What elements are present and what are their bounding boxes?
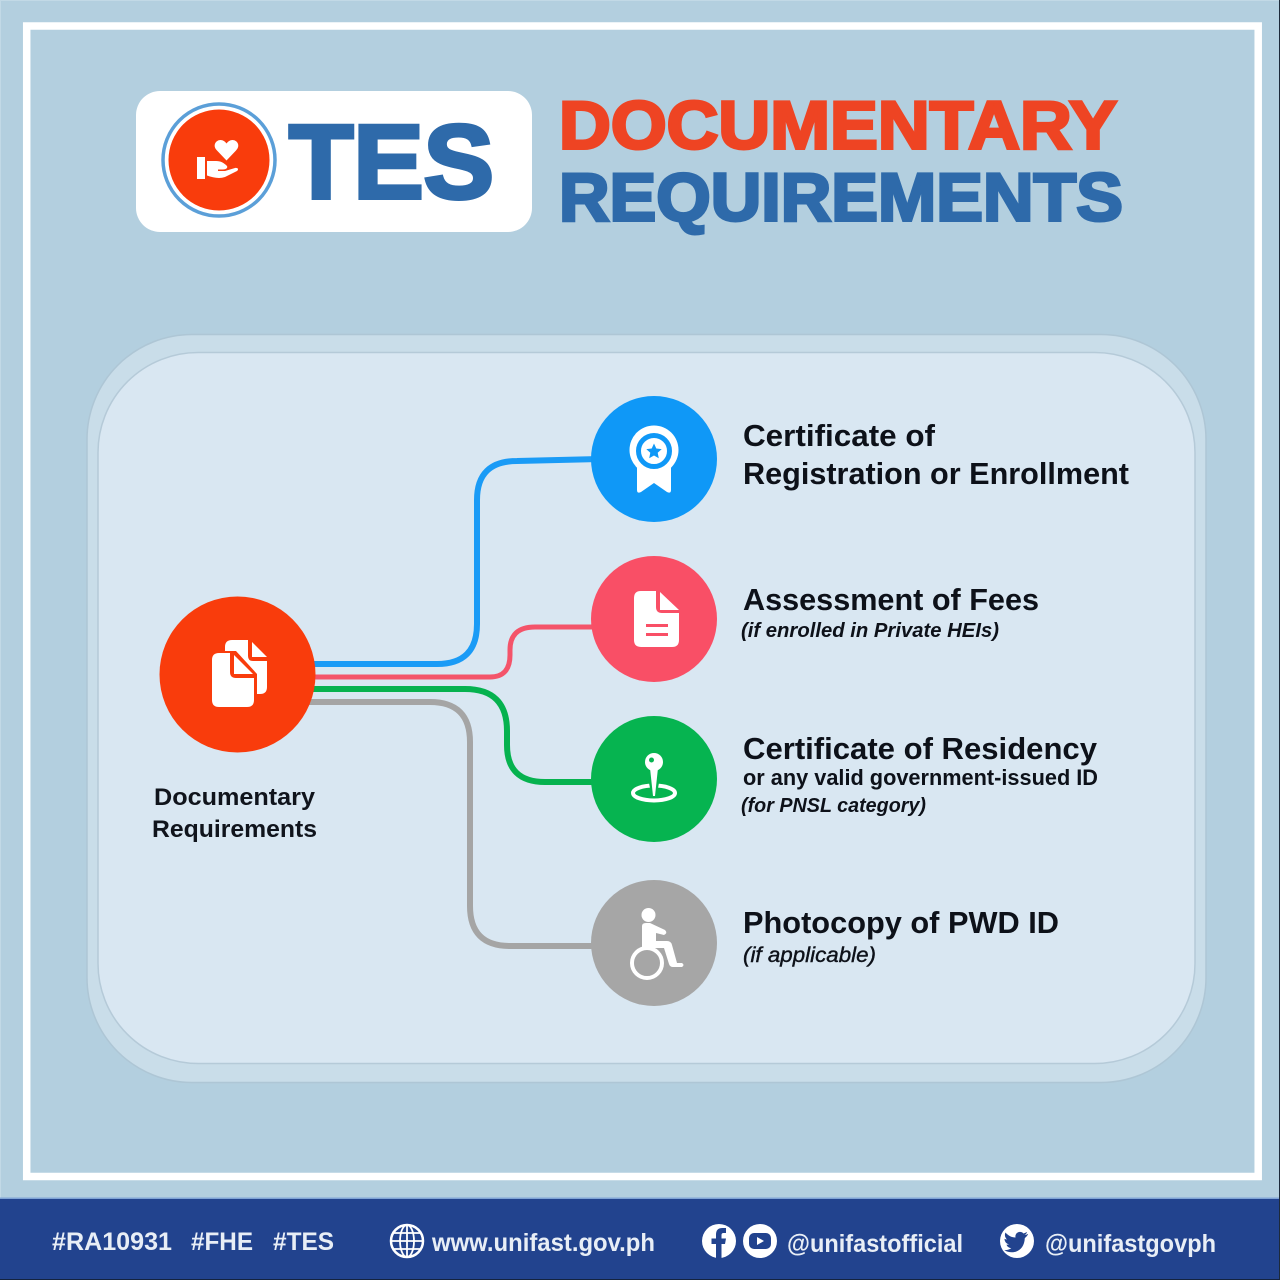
title: REQUIREMENTS xyxy=(559,160,1123,236)
source node: documents icon xyxy=(160,596,316,752)
icon: youtube xyxy=(743,1224,777,1258)
footer bar xyxy=(0,1198,1280,1280)
item text xyxy=(743,418,1129,491)
icon: facebook xyxy=(702,1224,736,1258)
title: DOCUMENTARY xyxy=(559,88,1117,164)
hashtags xyxy=(52,1228,334,1256)
connector: red line to assessment xyxy=(305,627,600,677)
twitter handle: @unifastgovph xyxy=(1045,1230,1216,1258)
item text: Certificate of xyxy=(743,418,936,453)
item text: (if enrolled in Private HEIs) xyxy=(741,620,999,642)
connector: green line to residency xyxy=(305,689,600,782)
item: photocopy of PWD ID xyxy=(591,880,1059,1006)
item text xyxy=(743,905,1059,967)
item text xyxy=(741,731,1098,817)
item text: Certificate of Residency xyxy=(743,731,1098,766)
source label: Requirements xyxy=(152,816,317,843)
icon: map pin xyxy=(591,716,717,842)
hashtags: #RA10931 xyxy=(52,1228,172,1256)
item text xyxy=(741,582,1039,642)
icon: heart in hand xyxy=(163,104,275,216)
icon: wheelchair xyxy=(591,880,717,1006)
item text: or any valid government-issued ID xyxy=(743,765,1098,790)
item text: Photocopy of PWD ID xyxy=(743,905,1059,940)
icon: globe xyxy=(391,1225,423,1257)
icon: ribbon badge xyxy=(591,396,717,522)
item text: Registration or Enrollment xyxy=(743,456,1129,491)
icon: document xyxy=(591,556,717,682)
icon: twitter xyxy=(1000,1224,1034,1258)
hashtags: #TES xyxy=(273,1228,334,1256)
TES wordmark: TES xyxy=(289,104,494,221)
facebook and youtube handle: @unifastofficial xyxy=(787,1230,963,1258)
item text: Assessment of Fees xyxy=(743,582,1039,617)
item: certificate of registration xyxy=(591,396,1129,522)
source label xyxy=(152,784,317,843)
header badge: TES logo xyxy=(136,91,532,232)
title xyxy=(559,88,1123,236)
item text: (for PNSL category) xyxy=(741,795,926,817)
website: www.unifast.gov.ph xyxy=(431,1229,655,1257)
connector: gray line to PWD ID xyxy=(305,702,600,946)
item text: (if applicable) xyxy=(743,944,876,967)
item: certificate of residency xyxy=(591,716,1098,842)
connector: blue line to registration xyxy=(305,459,600,664)
panel: requirements card xyxy=(87,334,1206,1082)
source label: Documentary xyxy=(154,784,315,811)
hashtags: #FHE xyxy=(191,1228,253,1256)
item: assessment of fees xyxy=(591,556,1039,682)
